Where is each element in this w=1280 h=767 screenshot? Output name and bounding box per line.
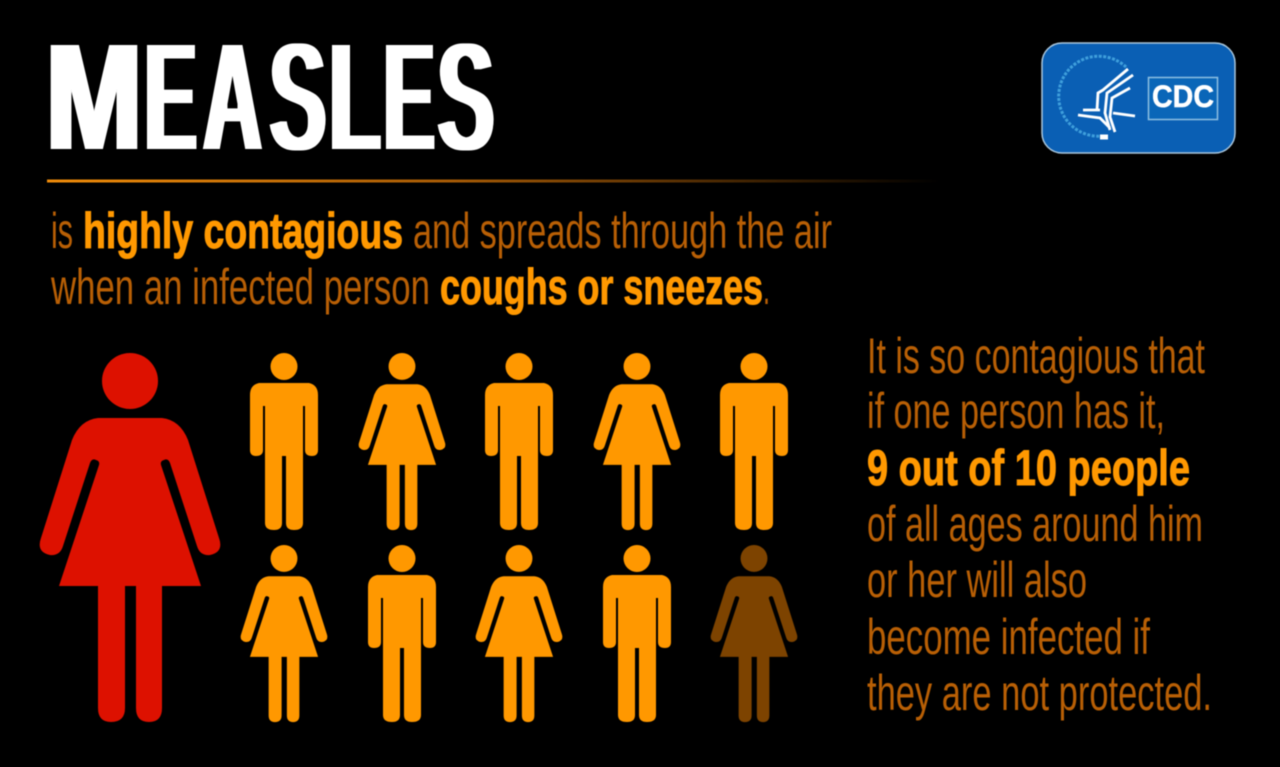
icon: person row 2 column 3 — [476, 545, 562, 722]
subtitle text — [50, 203, 832, 315]
subtitle text: and spreads through the air — [413, 203, 832, 259]
side text block: or her will also — [867, 552, 1087, 608]
subtitle text: . — [763, 259, 770, 315]
side text block: become infected if — [867, 609, 1150, 665]
icon: CDC logo: CDC — [1152, 78, 1214, 114]
title: M — [46, 10, 142, 185]
title: S — [438, 10, 494, 185]
icon: person row 2 column 4 — [603, 545, 671, 722]
side text block — [867, 328, 1212, 721]
title: E — [145, 10, 196, 185]
title: E — [384, 10, 434, 185]
title — [46, 10, 494, 185]
icon: person row 1 column 2 — [359, 353, 445, 530]
title: A — [203, 10, 262, 185]
icon: person row 1 column 1 — [250, 353, 318, 530]
subtitle text: coughs or sneezes — [440, 259, 763, 315]
icon: person row 1 column 3 — [485, 353, 553, 530]
icon: person row 2 column 2 — [368, 545, 436, 722]
side text block: 9 out of 10 people — [867, 440, 1190, 496]
title: L — [329, 10, 380, 185]
icon: CDC logo — [1042, 43, 1235, 153]
icon: person row 1 column 4 — [594, 353, 680, 530]
subtitle text: highly contagious — [83, 203, 403, 259]
icon: person row 2 column 1 — [241, 545, 327, 722]
subtitle text: when an infected person — [50, 259, 430, 315]
title: S — [270, 10, 326, 185]
icon: infected woman in red — [40, 353, 220, 722]
subtitle text: is — [51, 203, 73, 259]
icon: person row 1 column 5 — [720, 353, 788, 530]
icon: uninfected person in brown — [711, 545, 797, 722]
